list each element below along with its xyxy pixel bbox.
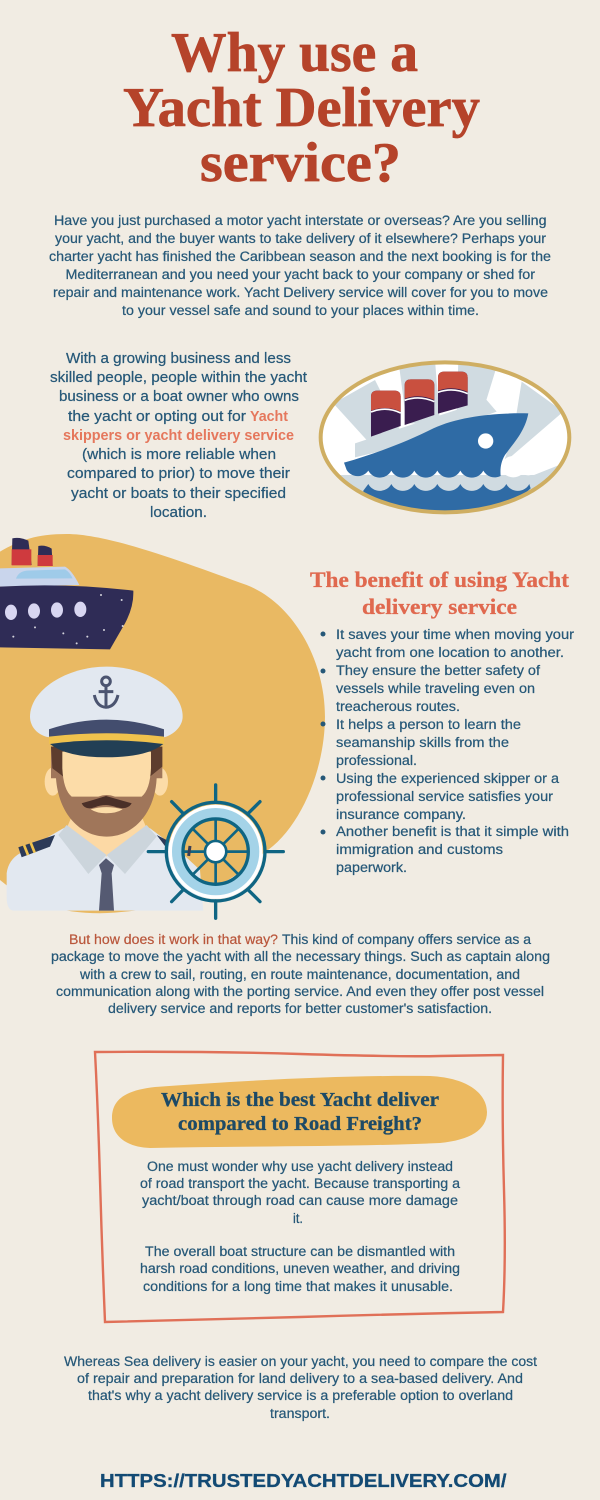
growing business paragraph: location.: [150, 505, 207, 521]
how it works paragraph: But how does it work in that way?: [69, 932, 278, 947]
title: [123, 22, 480, 194]
closing paragraph: [64, 1354, 537, 1421]
intro paragraph: to your vessel safe and sound to your places within time.: [122, 303, 479, 318]
rays: [333, 360, 567, 495]
face: [62, 752, 151, 797]
growing business paragraph: Yacht: [250, 409, 288, 425]
ears: [45, 768, 61, 796]
panel heading: Which is the best Yacht deliver: [161, 1089, 439, 1111]
hull: [344, 413, 528, 478]
growing business paragraph: yacht or boats to their specified: [71, 486, 286, 502]
porthole: [478, 433, 493, 449]
growing business paragraph: skilled people, people within the yacht: [50, 370, 307, 386]
panel body text: harsh road conditions, uneven weather, and driving: [140, 1261, 460, 1276]
growing business paragraph: the yacht or opting out for: [68, 409, 246, 425]
benefit bullet list: It helps a person to learn the: [336, 717, 521, 732]
panel body text: yacht/boat through road can cause more damage: [142, 1193, 458, 1208]
how it works paragraph: with a crew to sail, routing, en route maintenance, documentation, and: [79, 967, 520, 982]
closing paragraph: of repair and preparation for land delivery to a sea-based delivery. And: [77, 1371, 523, 1386]
how it works paragraph: This kind of company offers service as a: [282, 932, 532, 947]
benefit bullet list: They ensure the better safety of: [336, 663, 540, 678]
panel body text: of road transport the yacht. Because transporting a: [140, 1176, 461, 1191]
ship wheel: [148, 785, 283, 918]
growing business paragraph: compared to prior) to move their: [67, 466, 290, 482]
intro paragraph: Have you just purchased a motor yacht interstate or overseas? Are you selling: [54, 213, 546, 228]
panel: road freight comparison: [95, 1052, 505, 1322]
how it works paragraph: communication along with the porting service. And even they offer post vessel: [56, 984, 544, 999]
benefit bullet list: [320, 627, 575, 875]
closing paragraph: that's why a yacht delivery service is a preferable option to overland: [88, 1388, 513, 1403]
hat: [30, 667, 183, 737]
benefit bullet list: treacherous routes.: [336, 699, 460, 714]
closing paragraph: transport.: [270, 1406, 330, 1421]
funnels: [371, 372, 468, 437]
hair and beard: [51, 747, 162, 837]
panel heading: compared to Road Freight?: [178, 1113, 422, 1135]
how it works paragraph: package to move the yacht with all the necessary things. Such as captain along: [51, 949, 550, 964]
neck: [67, 817, 147, 857]
how it works paragraph: delivery service and reports for better customer's satisfaction.: [108, 1001, 492, 1016]
closing paragraph: Whereas Sea delivery is easier on your yacht, you need to compare the cost: [64, 1354, 537, 1369]
collar: [58, 825, 157, 874]
how it works paragraph: [51, 932, 550, 1016]
intro paragraph: repair and maintenance work. Yacht Delivery service will cover for you to move: [53, 285, 548, 300]
title: service?: [200, 132, 401, 194]
benefit bullet list: insurance company.: [336, 807, 466, 822]
intro paragraph: Mediterranean and you need your yacht back to your company or shed for: [66, 267, 536, 282]
benefit bullet list: professional.: [336, 753, 417, 768]
benefit bullet list: Using the experienced skipper or a: [336, 771, 560, 786]
growing business paragraph: (which is more reliable when: [82, 447, 276, 463]
growing business paragraph: With a growing business and less: [66, 351, 291, 367]
captain: [7, 667, 203, 911]
growing business paragraph: business or a boat owner who owns: [59, 389, 299, 405]
sea: [363, 484, 531, 510]
tie: [99, 858, 114, 911]
orange blob: [0, 534, 325, 913]
anchor: [94, 677, 118, 708]
website url: HTTPS://TRUSTEDYACHTDELIVERY.COM/: [100, 1470, 506, 1491]
growing business paragraph: skippers or yacht delivery service: [63, 428, 294, 444]
illustration: captain with ship and wheel: [0, 534, 325, 918]
benefit bullet list: It saves your time when moving your: [336, 627, 575, 642]
benefit bullet list: yacht from one location to another.: [336, 645, 564, 660]
white foam: [504, 456, 530, 478]
panel body text: [140, 1159, 461, 1294]
intro paragraph: charter yacht has finished the Caribbean season and the next booking is for the: [49, 249, 551, 264]
benefit bullet list: vessels while traveling even on: [336, 681, 535, 696]
title: Yacht Delivery: [123, 77, 480, 139]
moustache: [82, 796, 132, 808]
panel body text: conditions for a long time that makes it unusable.: [143, 1279, 453, 1294]
heading: the benefit: The benefit of using Yacht: [310, 567, 570, 592]
benefit bullet list: professional service satisfies your: [336, 789, 554, 804]
benefit bullet list: immigration and customs: [336, 842, 503, 857]
hand-drawn frame: [95, 1052, 505, 1322]
intro paragraph: your yacht, and the buyer wants to take delivery of it elsewhere? Perhaps your: [55, 231, 547, 246]
benefit bullet list: paperwork.: [336, 860, 407, 875]
shirt: [7, 828, 203, 911]
benefit bullet list: seamanship skills from the: [336, 735, 509, 750]
growing business paragraph: [50, 351, 307, 521]
panel body text: The overall boat structure can be dismantled with: [145, 1244, 455, 1259]
epaulets: [18, 835, 55, 857]
panel body text: One must wonder why use yacht delivery instead: [147, 1159, 453, 1174]
badge ring: [321, 362, 569, 512]
cruise ship: [0, 538, 133, 649]
yellow brush highlight: [112, 1076, 487, 1148]
title: Why use a: [171, 22, 418, 84]
heading: the benefit: delivery service: [362, 594, 517, 619]
panel body text: it.: [293, 1211, 303, 1226]
panel heading: [161, 1089, 439, 1135]
heading: the benefit: [310, 567, 570, 619]
icon: ship in oval badge: [321, 360, 569, 517]
intro paragraph: [49, 213, 551, 318]
benefit bullet list: Another benefit is that it simple with: [336, 824, 569, 839]
